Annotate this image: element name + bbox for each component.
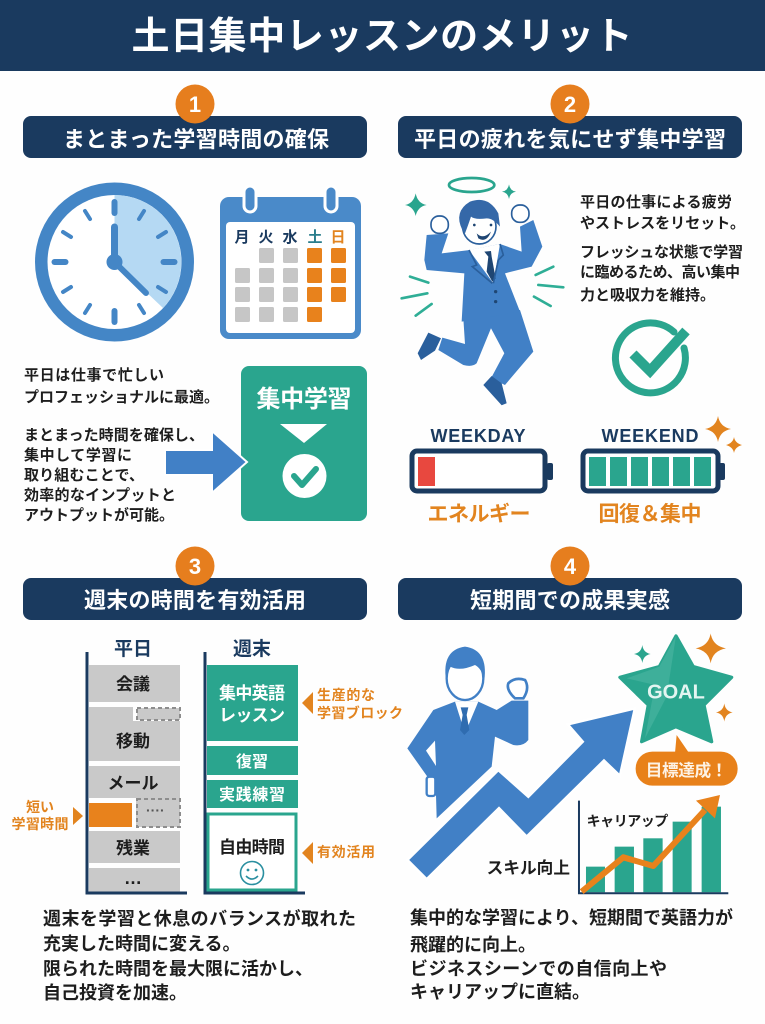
chart: weekend schedule	[205, 638, 305, 893]
chart: weekend schedule: 週末	[233, 638, 271, 660]
text block: panel 1 description: 取り組むことで、	[24, 467, 144, 484]
text block: panel 4 description	[410, 907, 733, 1002]
callout: productive study block	[302, 687, 403, 721]
icon: calendar: 火	[258, 229, 274, 246]
icon: focus study box	[241, 366, 367, 521]
chart: weekday schedule: ····	[146, 802, 165, 818]
text block: panel 2 description: やストレスをリセット。	[580, 215, 745, 232]
battery: weekend: 回復＆集中	[598, 503, 702, 526]
text block: panel 2 description: 平日の仕事による疲労	[580, 193, 732, 211]
arrow: to focus study	[165, 431, 247, 493]
header: title banner	[0, 0, 765, 71]
panel: 4 heading	[398, 546, 742, 620]
callout: short study time	[12, 799, 83, 832]
header: title banner: 土日集中レッスンのメリット	[132, 16, 632, 58]
panel: 4 heading: 4	[564, 554, 577, 579]
chart: weekend schedule: 自由時間	[219, 837, 285, 857]
icon: calendar: 月	[234, 229, 250, 246]
chart: weekend schedule: 実践練習	[219, 785, 285, 804]
panel: 1 heading: まとまった学習時間の確保	[63, 127, 329, 152]
chart: weekday schedule: 残業	[116, 838, 150, 858]
goal star	[620, 636, 732, 742]
battery: weekday: エネルギー	[428, 503, 530, 526]
panel: 2 heading: 2	[564, 92, 576, 117]
icon: calendar: 日	[330, 229, 346, 246]
text block: panel 1 description: まとまった時間を確保し、	[24, 426, 204, 444]
callout: short study time: 学習時間	[12, 816, 68, 832]
chart: weekday schedule: 会議	[116, 675, 150, 694]
businessman	[407, 647, 528, 818]
text block: panel 3 description: 充実した時間に変える。	[43, 934, 240, 954]
text block: panel 3 description: 限られた時間を最大限に活かし、	[43, 959, 313, 979]
speech bubble	[636, 735, 738, 786]
panel: 1 heading: 1	[189, 92, 201, 117]
callout: productive study block: 学習ブロック	[317, 705, 403, 721]
icon: check mark	[615, 323, 686, 393]
text block: panel 3 description: 自己投資を加速。	[43, 983, 187, 1003]
text block: panel 1 description: アウトプットが可能。	[24, 506, 174, 524]
text block: panel 2 description: に臨めるため、高い集中	[580, 263, 740, 281]
chart: weekday schedule: メール	[108, 774, 158, 793]
callout: short study time: 短い	[26, 799, 54, 815]
panel: 1 heading	[23, 84, 367, 158]
chart: weekend schedule: 復習	[236, 752, 268, 771]
icon: focus study box: 集中学習	[256, 386, 352, 413]
icon: clock	[35, 182, 194, 342]
battery: weekend: WEEKEND	[602, 426, 698, 446]
battery: weekday	[412, 426, 553, 526]
speech bubble: 目標達成！	[646, 760, 727, 780]
panel: 3 heading	[23, 546, 367, 620]
text block: panel 1 description: 集中して学習に	[24, 446, 132, 464]
text block: panel 2 description: フレッシュな状態で学習	[580, 243, 743, 261]
battery: weekend	[583, 416, 742, 526]
chart: weekday schedule: 移動	[116, 732, 150, 751]
icon: calendar: 土	[307, 229, 323, 246]
text block: panel 2 description	[580, 193, 745, 304]
chart: weekend schedule: レッスン	[219, 706, 285, 725]
text block: panel 4 description: キャリアップに直結。	[410, 982, 590, 1002]
goal star: GOAL	[647, 682, 705, 704]
panel: 3 heading: 週末の時間を有効活用	[84, 588, 306, 613]
panel: 4 heading: 短期間での成果実感	[470, 588, 670, 613]
callout: effective use	[302, 842, 375, 864]
text block: panel 3 description: 週末を学習と休息のバランスが取れた	[43, 908, 356, 929]
career bar chart: スキル向上	[487, 858, 570, 877]
icon: calendar	[220, 186, 361, 339]
icon: calendar: 水	[282, 229, 298, 246]
chart: weekend schedule: 集中英語	[219, 683, 285, 703]
chart: weekday schedule	[87, 639, 187, 893]
illustration: businessman, growth arrow, goal star, bar chart	[407, 633, 738, 893]
callout: productive study block: 生産的な	[317, 687, 375, 703]
battery: weekday: WEEKDAY	[430, 426, 526, 446]
career bar chart	[487, 795, 728, 893]
text block: panel 4 description: ビジネスシーンでの自信向上や	[410, 958, 667, 979]
growth arrow	[407, 708, 635, 879]
callout: effective use: 有効活用	[317, 844, 375, 860]
text block: panel 4 description: 集中的な学習により、短期間で英語力が	[410, 907, 733, 928]
text block: panel 1 description: 平日は仕事で忙しい	[24, 366, 164, 384]
text block: panel 3 description	[43, 908, 356, 1003]
text block: panel 1 description: 効率的なインプットと	[24, 486, 176, 504]
text block: panel 4 description: 飛躍的に向上。	[410, 935, 536, 955]
illustration: jumping businessman	[402, 178, 563, 405]
panel: 3 heading: 3	[189, 554, 201, 579]
sparkles	[696, 633, 726, 663]
text block: panel 1 description: プロフェッショナルに最適。	[24, 388, 219, 406]
chart: weekday schedule: …	[124, 868, 142, 888]
career bar chart: キャリアップ	[587, 813, 668, 829]
chart: weekday schedule: 平日	[114, 639, 152, 660]
panel: 2 heading	[398, 84, 742, 158]
panel: 2 heading: 平日の疲れを気にせず集中学習	[414, 127, 726, 152]
text block: panel 2 description: 力と吸収力を維持。	[580, 286, 715, 304]
text block: panel 1 description	[24, 366, 219, 524]
